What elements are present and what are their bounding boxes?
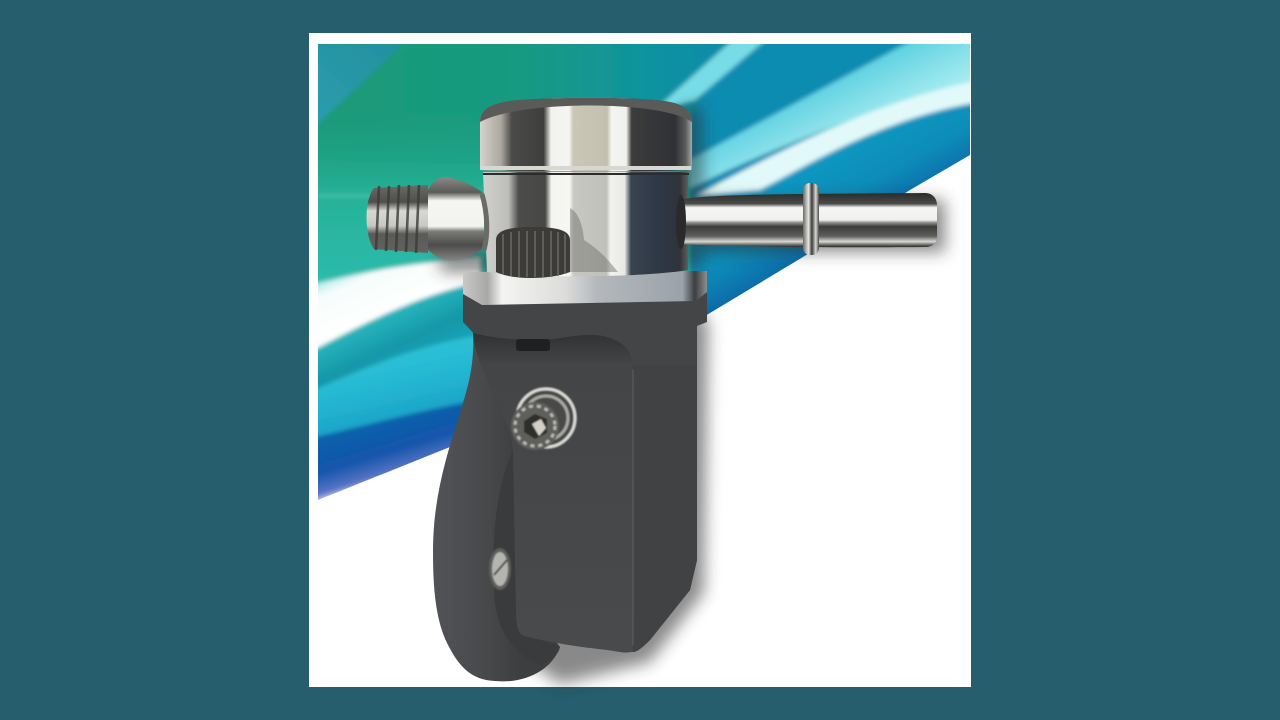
small dark nut	[516, 339, 550, 351]
side strip	[633, 365, 697, 652]
black knurled knob	[496, 227, 570, 278]
right pipe fitting	[676, 183, 937, 255]
silver plate	[463, 271, 707, 305]
hex socket bolt	[511, 386, 578, 450]
shadow beside knob	[570, 208, 618, 272]
wheel	[433, 333, 560, 681]
background swoosh	[300, 36, 980, 516]
dark body	[433, 293, 707, 681]
wheel inner shadow	[493, 450, 560, 665]
plate right edge highlight	[632, 370, 634, 645]
product image slide	[309, 33, 971, 688]
front plate	[473, 333, 633, 652]
small screw	[489, 548, 511, 590]
left threaded fitting	[366, 177, 487, 260]
lower cylinder	[483, 172, 688, 276]
white image panel	[309, 33, 971, 687]
drop shadow	[440, 108, 945, 684]
top cap	[480, 98, 692, 174]
